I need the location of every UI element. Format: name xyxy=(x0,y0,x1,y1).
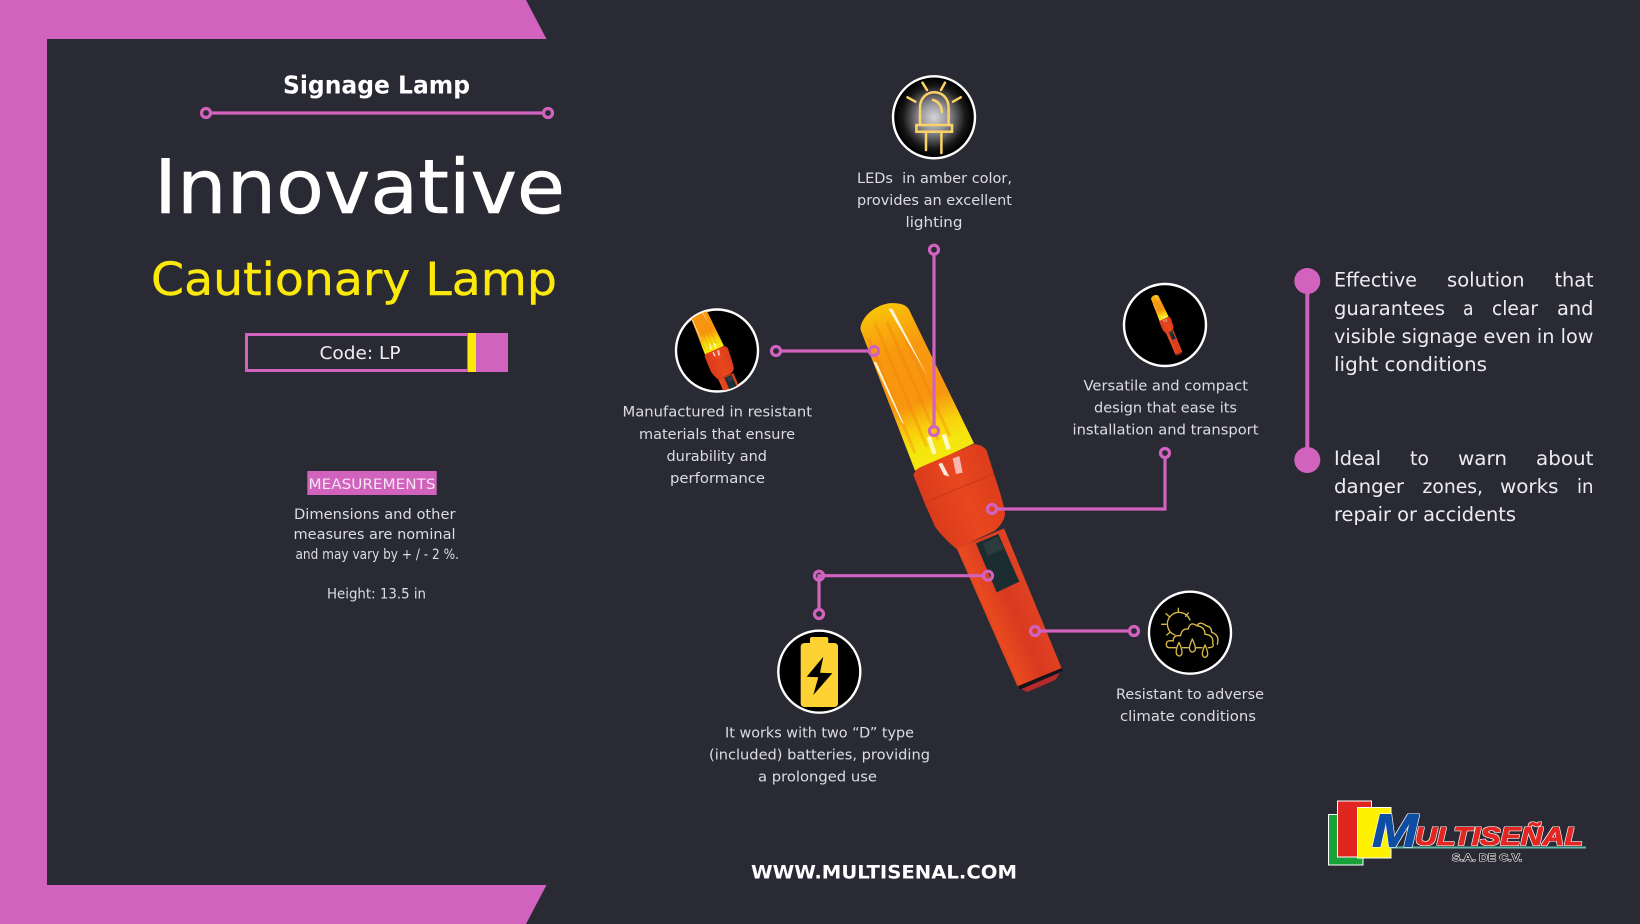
benefit text: ideal to warn: danger xyxy=(1334,475,1404,498)
text: versatile design xyxy=(1072,378,1259,438)
text: batteries xyxy=(709,726,930,786)
text: materials: materials that ensure xyxy=(639,427,795,443)
benefit text: ideal to warn: Ideal xyxy=(1334,447,1381,470)
icon: battery xyxy=(778,631,860,713)
text: materials: durability and xyxy=(666,449,767,465)
text: climate: Resistant to adverse xyxy=(1116,687,1264,703)
measurements block: Dimensions and other xyxy=(294,507,456,523)
text: climate xyxy=(1116,687,1264,725)
logo xyxy=(1328,801,1586,865)
subtitle: Cautionary Lamp: Cautionary Lamp xyxy=(151,253,557,306)
benefit text: effective solution: clear xyxy=(1492,297,1538,320)
text: LEDs: lighting xyxy=(906,215,962,231)
benefit text: effective solution: light conditions xyxy=(1334,353,1487,376)
benefit text: effective solution: guarantees xyxy=(1334,297,1445,320)
icon: lamp close-up xyxy=(674,308,760,393)
text: versatile design: installation and transport xyxy=(1072,422,1259,438)
text: batteries: (included) batteries, providing xyxy=(709,748,930,764)
connector: LED xyxy=(930,245,938,436)
benefit text: ideal to warn xyxy=(1334,447,1594,526)
measurements block: MEASUREMENTS xyxy=(308,477,436,493)
icon: LED xyxy=(893,76,975,158)
logo: S.A. DE C.V. xyxy=(1452,852,1522,864)
text: versatile design: design that ease its xyxy=(1094,400,1237,416)
text: batteries: a prolonged use xyxy=(758,770,877,786)
heading rule xyxy=(202,108,552,118)
benefit text: effective solution: Effective xyxy=(1334,269,1417,292)
text: materials xyxy=(622,405,812,487)
benefit text: effective solution: visible signage even in low xyxy=(1334,325,1594,348)
icon: weather xyxy=(1149,592,1231,674)
measurements block: Height: 13.5 in xyxy=(327,586,426,602)
eyebrow heading: Signage Lamp: Signage Lamp xyxy=(283,70,470,100)
text: batteries: It works with two “D” type xyxy=(725,726,914,742)
benefit text: effective solution: solution xyxy=(1447,269,1524,292)
benefit text: effective solution: a xyxy=(1463,297,1474,320)
benefit text: ideal to warn: about xyxy=(1536,447,1594,470)
text: materials: Manufactured in resistant xyxy=(622,405,812,421)
connector: batteries xyxy=(814,571,992,618)
measurements block: and may vary by + / - 2 %. xyxy=(296,547,459,563)
benefit text: effective solution xyxy=(1334,269,1594,376)
website: WWW.MULTISENAL.COM xyxy=(751,862,1017,884)
benefit text: effective solution: that xyxy=(1554,269,1594,292)
code tag: Code: LP xyxy=(320,344,400,364)
benefit text: ideal to warn: to xyxy=(1410,447,1429,470)
benefit text: ideal to warn: zones, xyxy=(1422,475,1483,498)
text: LEDs xyxy=(857,171,1012,231)
text: LEDs: LEDs in amber color, xyxy=(857,171,1012,187)
connector: versatile design xyxy=(988,448,1170,514)
connector: materials xyxy=(772,346,878,356)
text: climate: climate conditions xyxy=(1120,709,1256,725)
benefit text: ideal to warn: repair or accidents xyxy=(1334,503,1516,526)
benefits timeline xyxy=(1294,268,1320,473)
text: LEDs: provides an excellent xyxy=(857,193,1012,209)
icon: small lamp xyxy=(1124,284,1206,366)
logo: ULTISEÑAL xyxy=(1415,821,1583,851)
logo: M xyxy=(1372,804,1420,856)
benefit text: ideal to warn: works xyxy=(1500,475,1558,498)
measurements block xyxy=(294,471,459,602)
connector: climate xyxy=(1030,626,1138,636)
lamp product image xyxy=(861,303,1063,692)
text: versatile design: Versatile and compact xyxy=(1084,378,1248,394)
measurements block: measures are nominal xyxy=(294,527,456,543)
code tag xyxy=(246,333,508,372)
benefit text: ideal to warn: warn xyxy=(1458,447,1507,470)
text: materials: performance xyxy=(670,471,765,487)
pink frame xyxy=(0,0,546,924)
title: Innovative: Innovative xyxy=(154,143,565,231)
benefit text: effective solution: and xyxy=(1557,297,1594,320)
benefit text: ideal to warn: in xyxy=(1577,475,1594,498)
